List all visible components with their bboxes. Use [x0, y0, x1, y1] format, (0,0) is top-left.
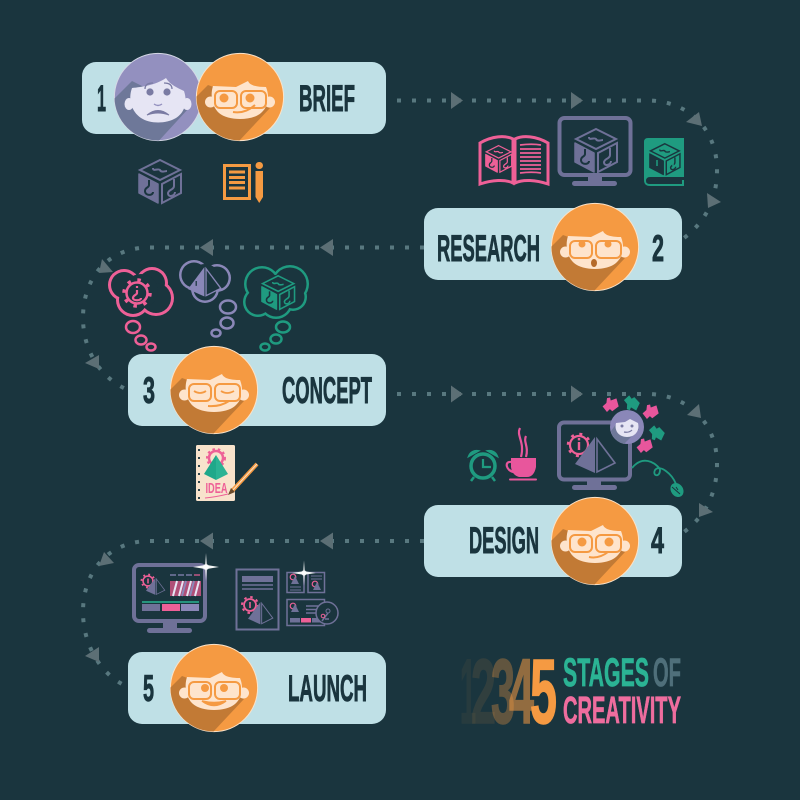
- thought bubble: green cube: [243, 265, 309, 350]
- icon: sparkle on print: [292, 560, 316, 586]
- step number 2: 2: [652, 228, 664, 269]
- icon: coffee cup: [507, 428, 537, 480]
- icon: green book: [644, 138, 684, 186]
- title numerals: [460, 641, 557, 743]
- title numerals: 1: [460, 641, 476, 743]
- icon: feedback thumbs: [600, 393, 667, 455]
- icon: idea sketch note: IDEA: [206, 480, 228, 497]
- panel: brief: [82, 52, 386, 142]
- icon: document and pencil: [224, 162, 263, 203]
- title word: creativity: CREATIVITY: [563, 690, 681, 732]
- avatar: thinking: [164, 346, 258, 450]
- icon: monitor with cube: [560, 118, 630, 186]
- avatar: focused: [545, 497, 639, 601]
- icon: design monitor: [559, 422, 630, 490]
- title numerals: 5: [530, 641, 557, 743]
- dotted path: design to launch: [83, 532, 424, 687]
- title numerals: 4: [509, 641, 534, 743]
- icon: alarm clock: [469, 451, 497, 481]
- icon: idea cube: [139, 160, 181, 203]
- avatar: worried client: [114, 52, 199, 142]
- step number 5: 5: [143, 668, 154, 709]
- step number 4: 4: [651, 520, 664, 561]
- title: 12345 stages of creativity: [460, 641, 681, 743]
- dotted path: brief to research: [397, 92, 721, 238]
- panel: concept: CONCEPT: [282, 370, 372, 411]
- icon: idea sketch note: [196, 445, 257, 501]
- panel: design: [424, 497, 682, 601]
- heading: launch: LAUNCH: [288, 668, 367, 709]
- title numerals: 2: [471, 641, 496, 743]
- step number 3: 3: [143, 370, 155, 411]
- panel: research: RESEARCH: [437, 228, 540, 269]
- panel: research: [424, 203, 682, 307]
- avatar: curious: [545, 203, 639, 307]
- title word: of: OF: [653, 651, 681, 695]
- dotted path: concept to design: [397, 386, 717, 532]
- dotted path: research to concept: [83, 239, 424, 390]
- panel: concept: [128, 346, 386, 450]
- thought bubble: purple pyramid: [179, 260, 236, 336]
- icon: computer mouse with cable: [632, 461, 686, 500]
- panel: design: DESIGN: [469, 520, 539, 561]
- heading: brief: BRIEF: [299, 78, 355, 119]
- avatar: creative listening: [190, 53, 284, 157]
- panel: launch: [128, 644, 386, 748]
- thought bubble: pink gear: [108, 267, 174, 350]
- title word: stages: STAGES: [563, 651, 649, 695]
- icon: launch monitor: [134, 565, 205, 633]
- title numerals: 3: [491, 641, 515, 743]
- panel: brief: 1: [97, 78, 106, 119]
- icon: launch print materials: [236, 570, 338, 630]
- avatar: happy: [164, 644, 258, 748]
- icon: open book: [480, 137, 548, 184]
- icon: sparkle on monitor: [193, 553, 219, 581]
- icon: reviewer avatar: [610, 410, 644, 444]
